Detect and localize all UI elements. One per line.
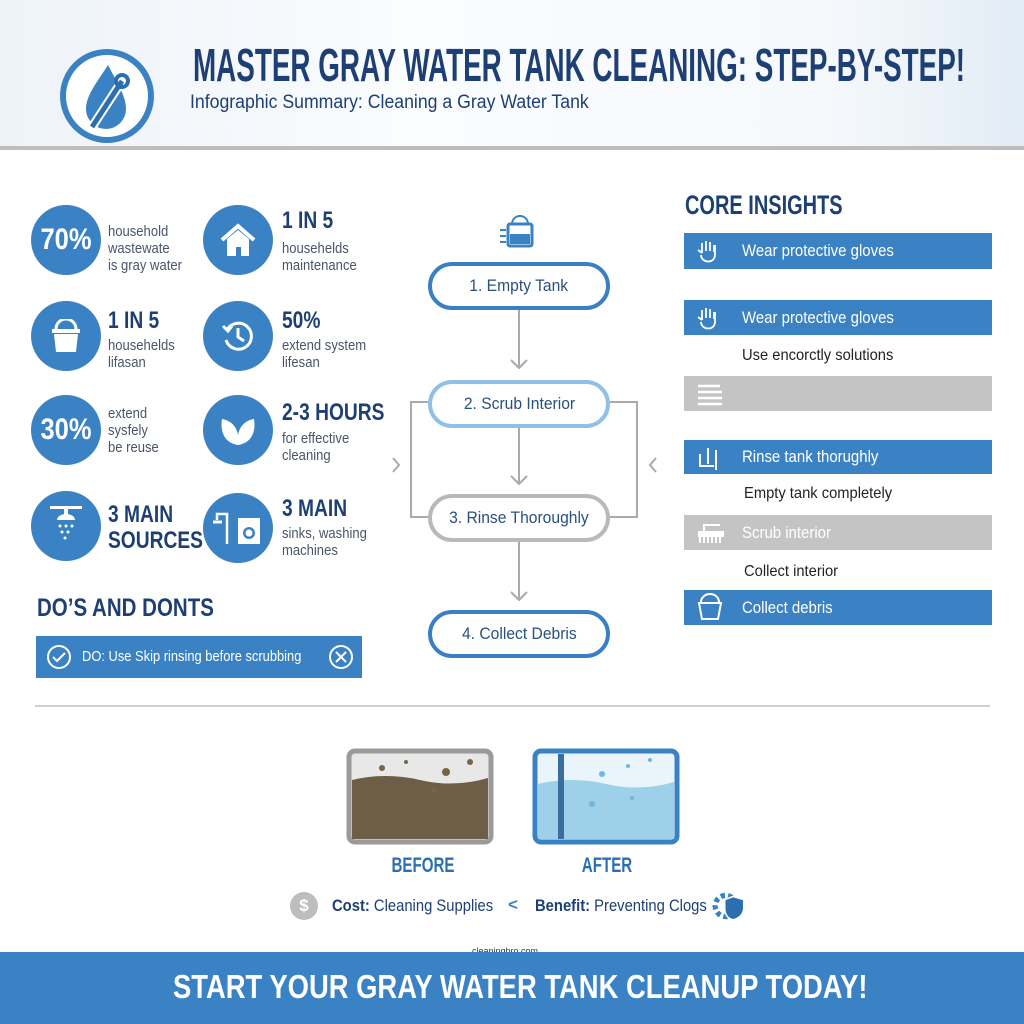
step 1: 1. Empty Tank xyxy=(470,276,568,295)
stat: 2-3 hours: 2-3 HOURS xyxy=(282,399,384,426)
step 3: 3. Rinse Thoroughly xyxy=(449,508,589,527)
cost benefit line: Cost: Cleaning Supplies xyxy=(332,896,493,915)
stat: 2-3 hours: for effective xyxy=(282,430,349,447)
stat: 50%: 50% xyxy=(282,307,320,334)
step 2 xyxy=(428,380,610,428)
core insights heading: CORE INSIGHTS xyxy=(685,190,843,220)
text: solutions: Use encorctly solutions xyxy=(742,347,893,364)
watermark: cleaningbro.com xyxy=(472,946,538,956)
stat: 70% xyxy=(31,205,182,275)
text: empty: Empty tank completely xyxy=(744,485,892,502)
bar: gray blank xyxy=(684,376,992,411)
bar: collect debris xyxy=(684,590,992,625)
step 3 xyxy=(428,494,610,542)
stat: 70%: is gray water xyxy=(108,257,182,274)
step 4: 4. Collect Debris xyxy=(462,624,576,643)
bar: rinse: Rinse tank thorughly xyxy=(742,447,878,466)
stat: 50%: lifesan xyxy=(282,354,320,371)
stat: 30%: 30% xyxy=(40,413,92,446)
label after: AFTER xyxy=(582,854,632,877)
bar: scrub xyxy=(684,515,992,550)
stat: 3 main sources: 3 MAIN xyxy=(108,501,173,528)
stat: 3 main sinks: 3 MAIN xyxy=(282,495,347,522)
bar: collect debris: Collect debris xyxy=(742,598,833,616)
bar: gloves 2: Wear protective gloves xyxy=(742,308,894,326)
footer banner: START YOUR GRAY WATER TANK CLEANUP TODAY! xyxy=(173,968,867,1005)
bar: gloves 1 xyxy=(684,233,992,269)
stat: 3 main sinks: sinks, washing xyxy=(282,525,367,542)
cost benefit line: < xyxy=(508,895,518,914)
stats panel xyxy=(31,205,384,563)
flowchart xyxy=(392,215,657,602)
footer banner xyxy=(0,952,1024,1024)
stat: 30%: sysfely xyxy=(108,422,148,439)
header icon xyxy=(60,49,154,143)
stat: 70%: 70% xyxy=(40,223,92,256)
stat: 1 in 5 bucket: lifasan xyxy=(108,354,146,371)
title: MASTER GRAY WATER TANK CLEANING: STEP-BY-STEP! xyxy=(193,39,965,91)
stat: 3 main sources: SOURCES xyxy=(108,527,203,554)
do's and donts bar: DO: Use Skip rinsing before scrubbing xyxy=(82,648,301,665)
stat: 1 in 5 house: maintenance xyxy=(282,257,357,274)
stat: 3 main sinks xyxy=(203,493,367,563)
stat: 30%: be reuse xyxy=(108,439,159,456)
stat: 30%: extend xyxy=(108,405,147,422)
stat: 70%: household xyxy=(108,223,168,240)
icon: dollar xyxy=(290,892,318,920)
stat: 1 in 5 bucket: househelds xyxy=(108,337,175,354)
cost benefit line: Benefit: Preventing Clogs xyxy=(535,896,707,915)
do's and donts heading: DO’S AND DONTS xyxy=(37,594,214,622)
stat: 3 main sources xyxy=(31,491,203,561)
icon: dollar: $ xyxy=(299,896,309,915)
icon: gear shield xyxy=(712,892,743,920)
header divider xyxy=(0,146,1024,150)
subtitle: Infographic Summary: Cleaning a Gray Water Tank xyxy=(190,92,589,113)
before image xyxy=(346,748,494,844)
do's and donts bar xyxy=(36,636,362,678)
icon: check xyxy=(47,645,71,669)
stat: 1 in 5 house: 1 IN 5 xyxy=(282,207,333,234)
stat: 3 main sinks: machines xyxy=(282,542,338,559)
icon: cross xyxy=(329,645,353,669)
stat: 1 in 5 bucket: 1 IN 5 xyxy=(108,307,159,334)
stat: 50% xyxy=(203,301,366,371)
stat: 30% xyxy=(31,395,159,465)
header background xyxy=(0,0,1024,146)
step 4 xyxy=(428,610,610,658)
section divider xyxy=(35,705,990,707)
stat: 70%: wastewate xyxy=(108,240,170,257)
bar: rinse xyxy=(684,440,992,474)
bar: gloves 1: Wear protective gloves xyxy=(742,241,894,260)
bar: gloves 2 xyxy=(684,300,992,335)
stat: 1 in 5 bucket xyxy=(31,301,175,371)
after image xyxy=(532,748,680,844)
label before: BEFORE xyxy=(391,854,454,877)
stat: 1 in 5 house xyxy=(203,205,357,275)
insights list xyxy=(684,233,992,625)
stat: 2-3 hours: cleaning xyxy=(282,447,331,464)
cost benefit line xyxy=(290,892,743,920)
step 1 xyxy=(428,262,610,310)
stat: 2-3 hours xyxy=(203,395,384,465)
stat: 1 in 5 house: househelds xyxy=(282,240,349,257)
text: collect interior: Collect interior xyxy=(744,563,838,580)
bar: scrub: Scrub interior xyxy=(742,522,831,542)
stat: 50%: extend system xyxy=(282,337,366,354)
step 2: 2. Scrub Interior xyxy=(463,394,575,413)
